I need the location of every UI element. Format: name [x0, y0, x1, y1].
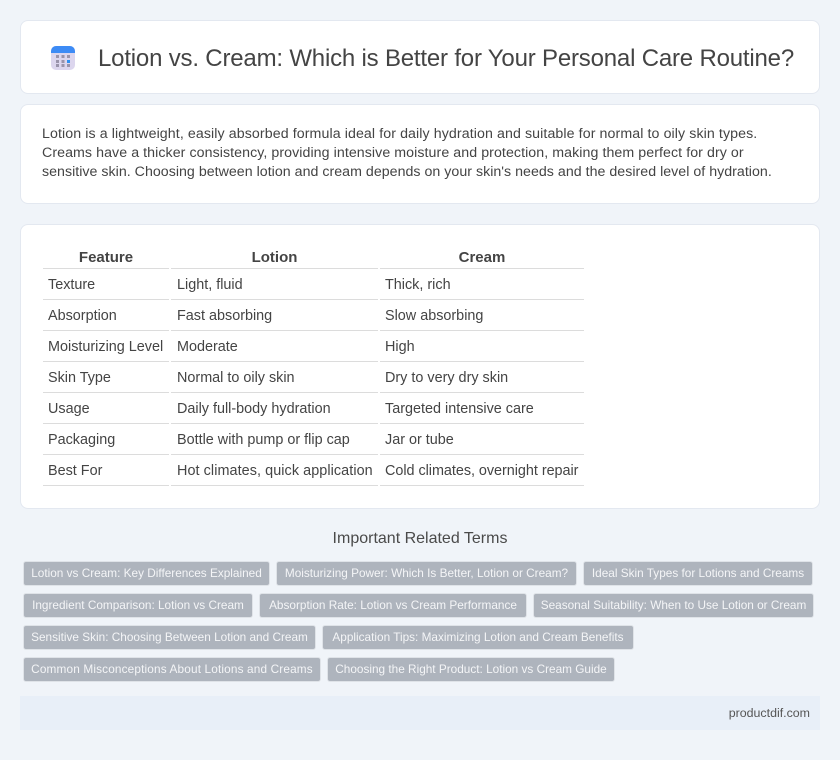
tag: Application Tips: Maximizing Lotion and Cream Benefits [332, 630, 624, 644]
table header row: Cream [459, 249, 505, 266]
heading: important related terms: Important Related Terms [333, 530, 507, 547]
tag [23, 561, 270, 586]
related terms tags [23, 561, 814, 682]
footer bar [20, 696, 820, 730]
row: best for [48, 463, 578, 479]
row: texture: Texture [48, 277, 95, 293]
intro paragraph: sensitive skin. Choosing between lotion and cream depends on your skin's needs and the desired level of hydration. [42, 164, 772, 180]
tag: Ingredient Comparison: Lotion vs Cream [32, 598, 244, 612]
tag: Absorption Rate: Lotion vs Cream Performance [269, 598, 517, 612]
row: moisturizing level: High [385, 339, 415, 355]
tag [23, 657, 321, 682]
row: usage: Usage [48, 401, 90, 417]
row: packaging: Jar or tube [385, 432, 454, 448]
row: moisturizing level: Moderate [177, 339, 238, 355]
row: absorption: Fast absorbing [177, 308, 272, 324]
intro paragraph [42, 126, 772, 180]
row: packaging: Packaging [48, 432, 115, 448]
tag [322, 625, 634, 650]
tag [23, 593, 253, 618]
tag: Lotion vs Cream: Key Differences Explained [31, 566, 262, 580]
tag [23, 625, 316, 650]
intro paragraph: Lotion is a lightweight, easily absorbed formula ideal for daily hydration and suitable for normal to oily skin types. [42, 126, 757, 142]
panel: introduction text [20, 104, 820, 204]
icon: calendar app [51, 46, 75, 70]
table header row: Feature [79, 249, 133, 266]
row: skin type: Normal to oily skin [177, 370, 295, 386]
row: skin type: Skin Type [48, 370, 111, 386]
row: texture [48, 277, 451, 293]
tag: Common Misconceptions About Lotions and Creams [31, 662, 313, 676]
row: best for: Cold climates, overnight repair [385, 463, 578, 479]
row: skin type [48, 370, 508, 386]
table header row [79, 249, 505, 266]
tag: Seasonal Suitability: When to Use Lotion or Cream [541, 598, 806, 612]
tag [327, 657, 615, 682]
row: best for: Hot climates, quick application [177, 463, 373, 479]
tag [583, 561, 813, 586]
tag [259, 593, 527, 618]
tag: Choosing the Right Product: Lotion vs Cream Guide [335, 662, 607, 676]
tag: Moisturizing Power: Which Is Better, Lotion or Cream? [285, 566, 568, 580]
tag: Sensitive Skin: Choosing Between Lotion and Cream [31, 630, 308, 644]
row: skin type: Dry to very dry skin [385, 370, 508, 386]
title: Lotion vs. Cream: Which is Better for Your Personal Care Routine? [98, 45, 794, 72]
row: usage [48, 401, 534, 417]
row: usage: Daily full-body hydration [177, 401, 331, 417]
intro paragraph: Creams have a thicker consistency, providing intensive moisture and protection, making them perfect for dry or [42, 145, 744, 161]
row: best for: Best For [48, 463, 102, 479]
comparison table [43, 249, 584, 486]
row: absorption: Slow absorbing [385, 308, 483, 324]
tag [276, 561, 577, 586]
row: texture: Light, fluid [177, 277, 243, 293]
row: texture: Thick, rich [385, 277, 451, 293]
table header row: Lotion [252, 249, 297, 266]
row: packaging: Bottle with pump or flip cap [177, 432, 350, 448]
row: usage: Targeted intensive care [385, 401, 534, 417]
row: packaging [48, 432, 454, 448]
row: absorption: Absorption [48, 308, 117, 324]
row: moisturizing level: Moisturizing Level [48, 339, 163, 355]
tag: Ideal Skin Types for Lotions and Creams [592, 566, 804, 580]
row: absorption [48, 308, 483, 324]
tag [533, 593, 814, 618]
panel: header [20, 20, 820, 94]
row: moisturizing level [48, 339, 415, 355]
panel: comparison table [20, 224, 820, 509]
footer site name: productdif.com [729, 706, 810, 720]
